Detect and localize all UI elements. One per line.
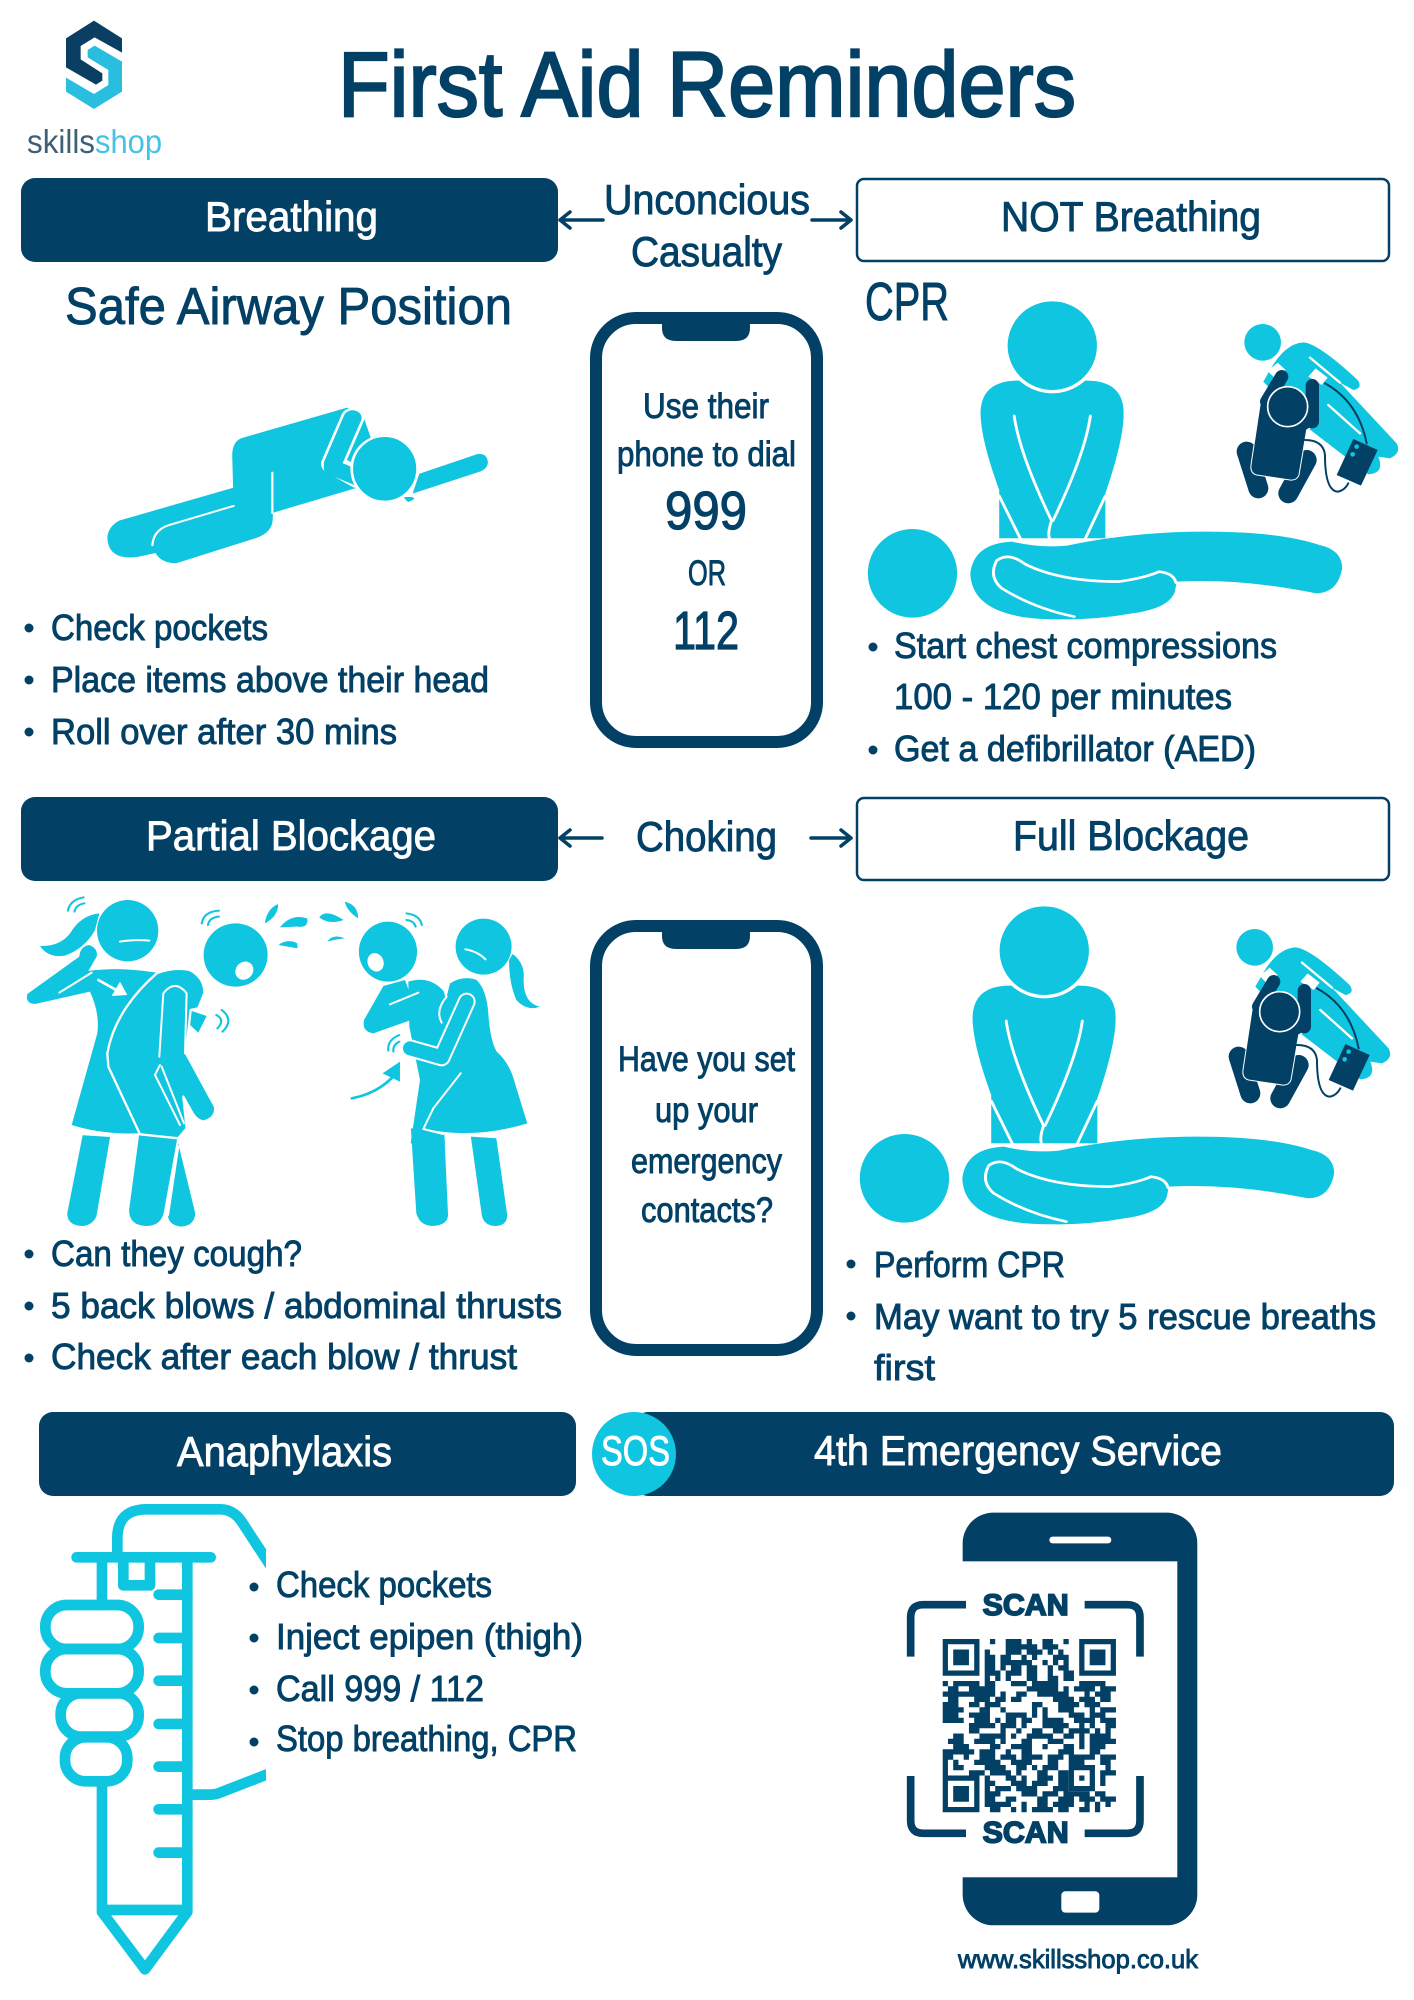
- bullet list: anaphylaxis: Inject epipen (thigh): [276, 1616, 583, 1657]
- heading: unconscious casualty: Casualty: [631, 228, 782, 275]
- arrow: to partial blockage: [560, 830, 602, 846]
- logo: skillsshop: [27, 21, 162, 160]
- panel: 4th emergency service header: [592, 1412, 1394, 1496]
- logo wordmark: skills: [27, 123, 95, 160]
- AED illustration: [1244, 324, 1398, 493]
- panel: phone dial 999: [596, 318, 817, 742]
- head and mouth: [204, 923, 268, 987]
- panel: partial blockage header: Partial Blockage: [146, 812, 436, 859]
- logo wordmark: shop: [95, 123, 162, 160]
- legs: [411, 1128, 507, 1226]
- droplets and motion lines: [68, 897, 422, 1052]
- bullet list: partial blockage: Check after each blow / thrust: [51, 1336, 517, 1377]
- phone text: [617, 387, 796, 661]
- bullet list: anaphylaxis: Stop breathing, CPR: [276, 1718, 577, 1759]
- bullet list: full blockage: May want to try 5 rescue breaths: [874, 1296, 1376, 1337]
- QR code: [943, 1642, 1116, 1810]
- panel: 4th emergency service header: SOS: [601, 1427, 670, 1474]
- panel: breathing header: [21, 178, 558, 262]
- bullet list: breathing: Check pockets: [51, 607, 268, 648]
- icon: phone with QR code: [911, 1513, 1197, 1925]
- bullet list: full blockage: Perform CPR: [874, 1244, 1065, 1285]
- back blows pair: [27, 900, 268, 1227]
- bullet list: breathing: Place items above their head: [51, 659, 489, 700]
- rescuer: [981, 301, 1124, 544]
- upper bodies: [27, 900, 215, 1138]
- abdominal thrusts pair: [352, 919, 540, 1226]
- panel: breathing header: Breathing: [205, 193, 378, 240]
- upper bodies: [364, 978, 527, 1143]
- panel: partial blockage header: [21, 797, 558, 881]
- panel: not breathing header: NOT Breathing: [1001, 193, 1261, 240]
- phone text: emergency: [631, 1142, 782, 1181]
- bullet list: CPR: [868, 625, 1277, 769]
- arrow: to breathing: [560, 212, 603, 228]
- bullet list: anaphylaxis: [250, 1564, 583, 1759]
- bullet list: full blockage: first: [874, 1347, 935, 1388]
- phone text: up your: [655, 1091, 758, 1130]
- icon: epipen in hand: [45, 1509, 270, 1969]
- icon: CPR with AED (full blockage): [860, 906, 1390, 1224]
- panel: full blockage header: Full Blockage: [1013, 812, 1249, 859]
- icon: CPR with AED: [868, 301, 1398, 619]
- phone text: phone to dial: [617, 435, 796, 474]
- bullet list: breathing: [24, 607, 489, 752]
- heads: [352, 919, 540, 1098]
- panel: full blockage header: [857, 798, 1389, 880]
- phone text: [618, 1040, 795, 1230]
- bullet list: anaphylaxis: Check pockets: [276, 1564, 492, 1605]
- icon: back blows and abdominal thrusts: [27, 897, 540, 1227]
- phone text: contacts?: [641, 1191, 773, 1230]
- AED rescuer: [1247, 363, 1378, 493]
- heading: safe airway position: Safe Airway Position: [65, 278, 512, 336]
- logo icon: hexagon S: [66, 21, 122, 109]
- bullet list: CPR: Start chest compressions: [894, 625, 1277, 666]
- legs: [67, 1128, 195, 1227]
- panel: phone emergency contacts: [596, 926, 817, 1350]
- heading: choking: Choking: [636, 813, 777, 860]
- scan labels: SCAN: [983, 1816, 1069, 1849]
- website url: www.skillsshop.co.uk: [957, 1944, 1199, 1974]
- phone text: 112: [673, 601, 739, 661]
- bullet list: breathing: Roll over after 30 mins: [51, 711, 397, 752]
- heading: unconscious casualty: [604, 176, 810, 275]
- phone text: Use their: [643, 387, 769, 426]
- arrow: to full blockage: [811, 830, 851, 846]
- casualty: [868, 529, 1342, 619]
- icon: recovery position: [107, 408, 488, 563]
- AED casualty: [1244, 324, 1398, 474]
- heading: unconscious casualty: Unconcious: [604, 176, 810, 223]
- title: First Aid Reminders: [338, 34, 1076, 136]
- panel: 4th emergency service header: 4th Emergency Service: [814, 1427, 1222, 1474]
- logo wordmark: [27, 123, 162, 160]
- panel: not breathing header: [857, 179, 1389, 261]
- bullet list: CPR: Get a defibrillator (AED): [894, 728, 1256, 769]
- heading: CPR: CPR: [865, 272, 949, 332]
- CPR illustration: [868, 301, 1342, 619]
- phone text: Have you set: [618, 1040, 795, 1079]
- scan labels: [983, 1589, 1069, 1849]
- bullet list: full blockage: [846, 1244, 1376, 1388]
- panel: anaphylaxis header: Anaphylaxis: [177, 1428, 392, 1475]
- bullet list: CPR: 100 - 120 per minutes: [894, 676, 1232, 717]
- bullet list: anaphylaxis: Call 999 / 112: [276, 1668, 484, 1709]
- scan labels: SCAN: [983, 1589, 1069, 1622]
- bullet list: partial blockage: [24, 1233, 562, 1377]
- bullet list: partial blockage: Can they cough?: [51, 1233, 302, 1274]
- phone text: 999: [665, 481, 747, 541]
- bullet list: partial blockage: 5 back blows / abdominal thrusts: [51, 1285, 562, 1326]
- panel: anaphylaxis header: [39, 1412, 576, 1496]
- arrow: to not breathing: [812, 212, 851, 228]
- scan brackets: [911, 1605, 1140, 1833]
- phone text: OR: [688, 554, 726, 593]
